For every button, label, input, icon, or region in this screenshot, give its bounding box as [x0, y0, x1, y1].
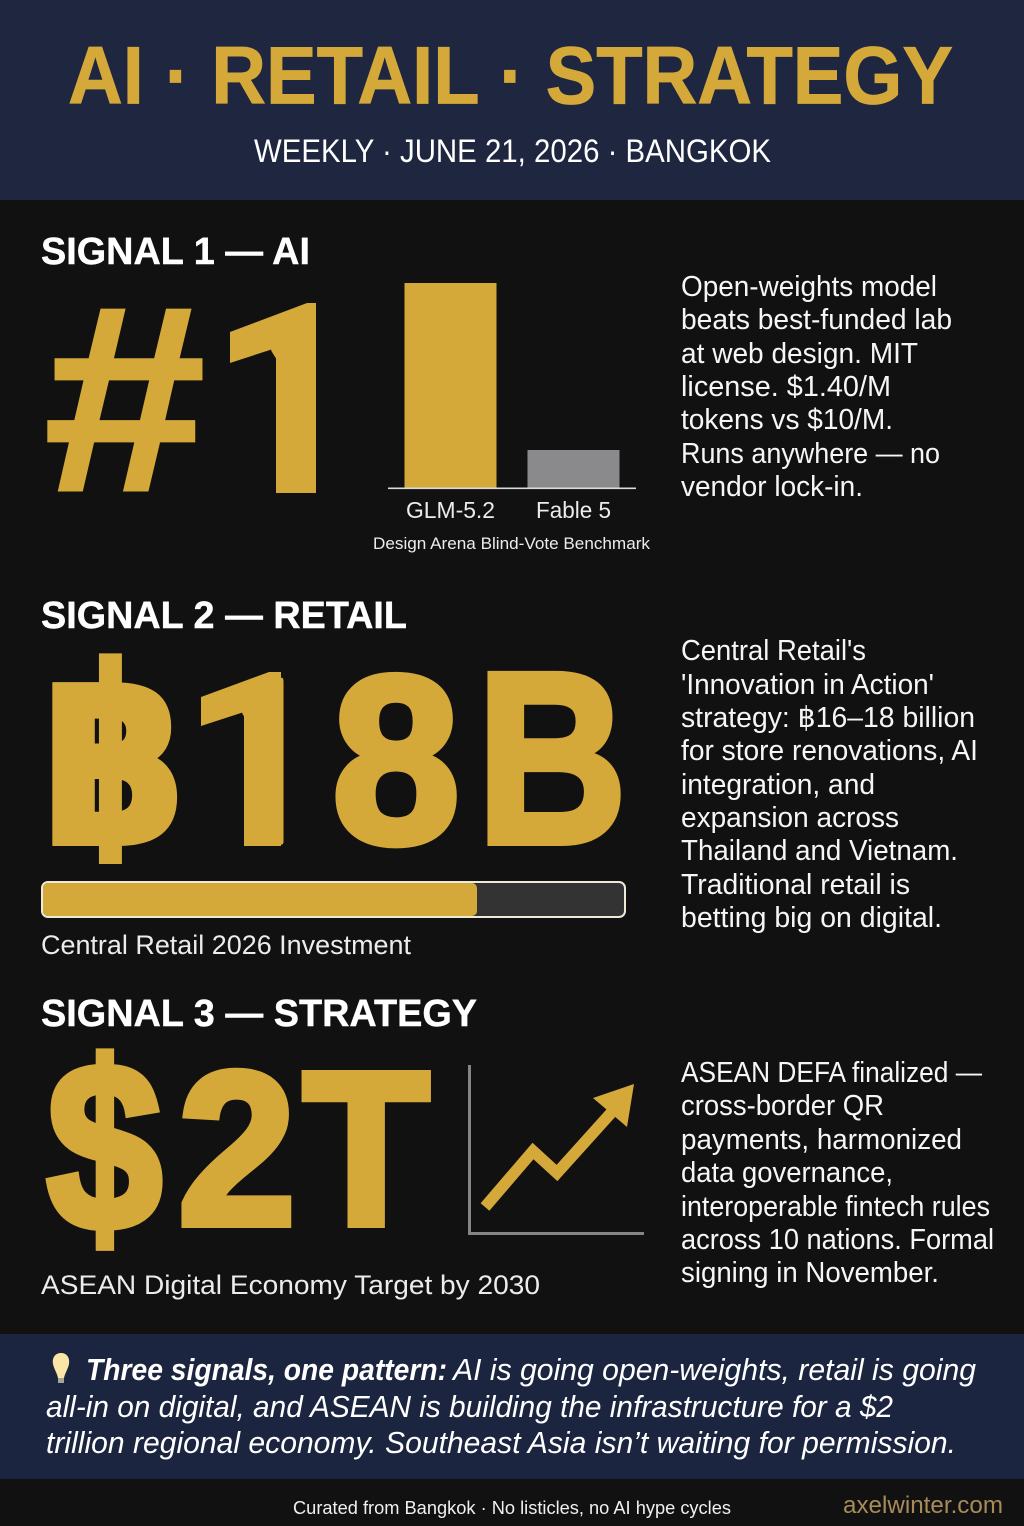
text block: signal 1 description: tokens vs $10/M. — [681, 404, 893, 436]
big number: 18 billion baht: B — [477, 623, 627, 894]
icon: light bulb — [53, 1353, 69, 1383]
summary text: AI is going open-weights, retail is going — [451, 1352, 976, 1387]
line chart icon: rising arrow — [470, 1065, 644, 1234]
text block: signal 1 description — [681, 271, 952, 503]
heading: signal 2: SIGNAL 2 — RETAIL — [41, 595, 407, 637]
text block: signal 3 description: interoperable fintech rules — [681, 1191, 990, 1223]
text block: signal 2 description — [681, 635, 978, 934]
text block: signal 3 description: ASEAN DEFA finalized — — [681, 1057, 982, 1089]
big number: #1 — [44, 251, 355, 546]
text block: signal 3 description: cross-border QR — [681, 1090, 884, 1122]
text block: signal 2 description: integration, and — [681, 769, 875, 801]
big number: 2 trillion dollars: 2 — [178, 1026, 296, 1271]
summary text — [46, 1352, 976, 1460]
big number: 18 billion baht — [52, 653, 621, 864]
text block: signal 2 description: strategy: ฿16–18 billion — [681, 702, 975, 734]
heading: signal 3: SIGNAL 3 — STRATEGY — [41, 993, 477, 1035]
text block: signal 1 description: beats best-funded lab — [681, 304, 952, 336]
panel: signal 1 AI — [41, 231, 952, 553]
big number: 2 trillion dollars — [47, 1016, 429, 1280]
big number: #1: 1 — [248, 292, 355, 525]
panel: signal 3 strategy — [41, 993, 994, 1300]
summary text: Three signals, one pattern: — [86, 1352, 447, 1387]
bar chart: benchmark: GLM-5.2 — [406, 497, 495, 523]
bar chart: benchmark — [373, 283, 650, 553]
big number: #1: # — [44, 251, 206, 546]
text block: signal 1 description: at web design. MIT — [681, 338, 918, 370]
text block: signal 3 description: payments, harmonized — [681, 1124, 962, 1156]
big number: 2 trillion dollars: $ — [47, 1016, 162, 1280]
text block: signal 1 description: license. $1.40/M — [681, 371, 891, 403]
text block: signal 1 description: vendor lock-in. — [681, 471, 863, 503]
text block: signal 2 description: Central Retail's — [681, 635, 866, 667]
text block: signal 3 description — [681, 1057, 994, 1289]
text block: signal 3 description: across 10 nations. Formal — [681, 1224, 994, 1256]
summary panel — [0, 1334, 1024, 1479]
text block: signal 3 description: data governance, — [681, 1157, 893, 1189]
footer credit: Curated from Bangkok · No listicles, no AI hype cycles — [293, 1498, 731, 1518]
text block: signal 2 description: betting big on digital. — [681, 902, 942, 934]
big number: 18 billion baht: 1 — [221, 658, 321, 877]
bar chart: benchmark: Fable 5 — [536, 497, 611, 523]
panel: signal 2 retail — [41, 595, 978, 960]
summary text: all-in on digital, and ASEAN is building the infrastructure for a $2 — [46, 1389, 893, 1424]
big number: 18 billion baht: 8 — [332, 626, 460, 893]
footer site name: axelwinter.com — [843, 1492, 1003, 1519]
footer — [293, 1492, 1003, 1519]
text block: signal 1 description: Open-weights model — [681, 271, 937, 303]
text block: signal 3 description: signing in November. — [681, 1257, 939, 1289]
text block: signal 1 description: Runs anywhere — no — [681, 438, 940, 470]
text block: signal 2 description: Thailand and Vietnam. — [681, 835, 958, 867]
big number: 2 trillion dollars: T — [303, 1028, 429, 1271]
progress bar — [42, 882, 625, 917]
text block: signal 2 description: for store renovations, AI — [681, 735, 978, 767]
bar chart: benchmark: Design Arena Blind-Vote Benchmark — [373, 534, 650, 553]
big number: 18 billion baht: ฿ — [43, 623, 186, 894]
progress label: Central Retail 2026 Investment — [41, 930, 411, 960]
title: AI · RETAIL · STRATEGY — [68, 30, 953, 122]
text block: signal 2 description: Traditional retail is — [681, 869, 910, 901]
summary text: trillion regional economy. Southeast Asia isn’t waiting for permission. — [46, 1425, 956, 1460]
chart label: ASEAN Digital Economy Target by 2030 — [41, 1270, 540, 1300]
heading: signal 1: SIGNAL 1 — AI — [41, 231, 310, 273]
text block: signal 2 description: 'Innovation in Action' — [681, 669, 934, 701]
header panel — [0, 0, 1024, 200]
subtitle: WEEKLY · JUNE 21, 2026 · BANGKOK — [254, 133, 771, 169]
text block: signal 2 description: expansion across — [681, 802, 899, 834]
